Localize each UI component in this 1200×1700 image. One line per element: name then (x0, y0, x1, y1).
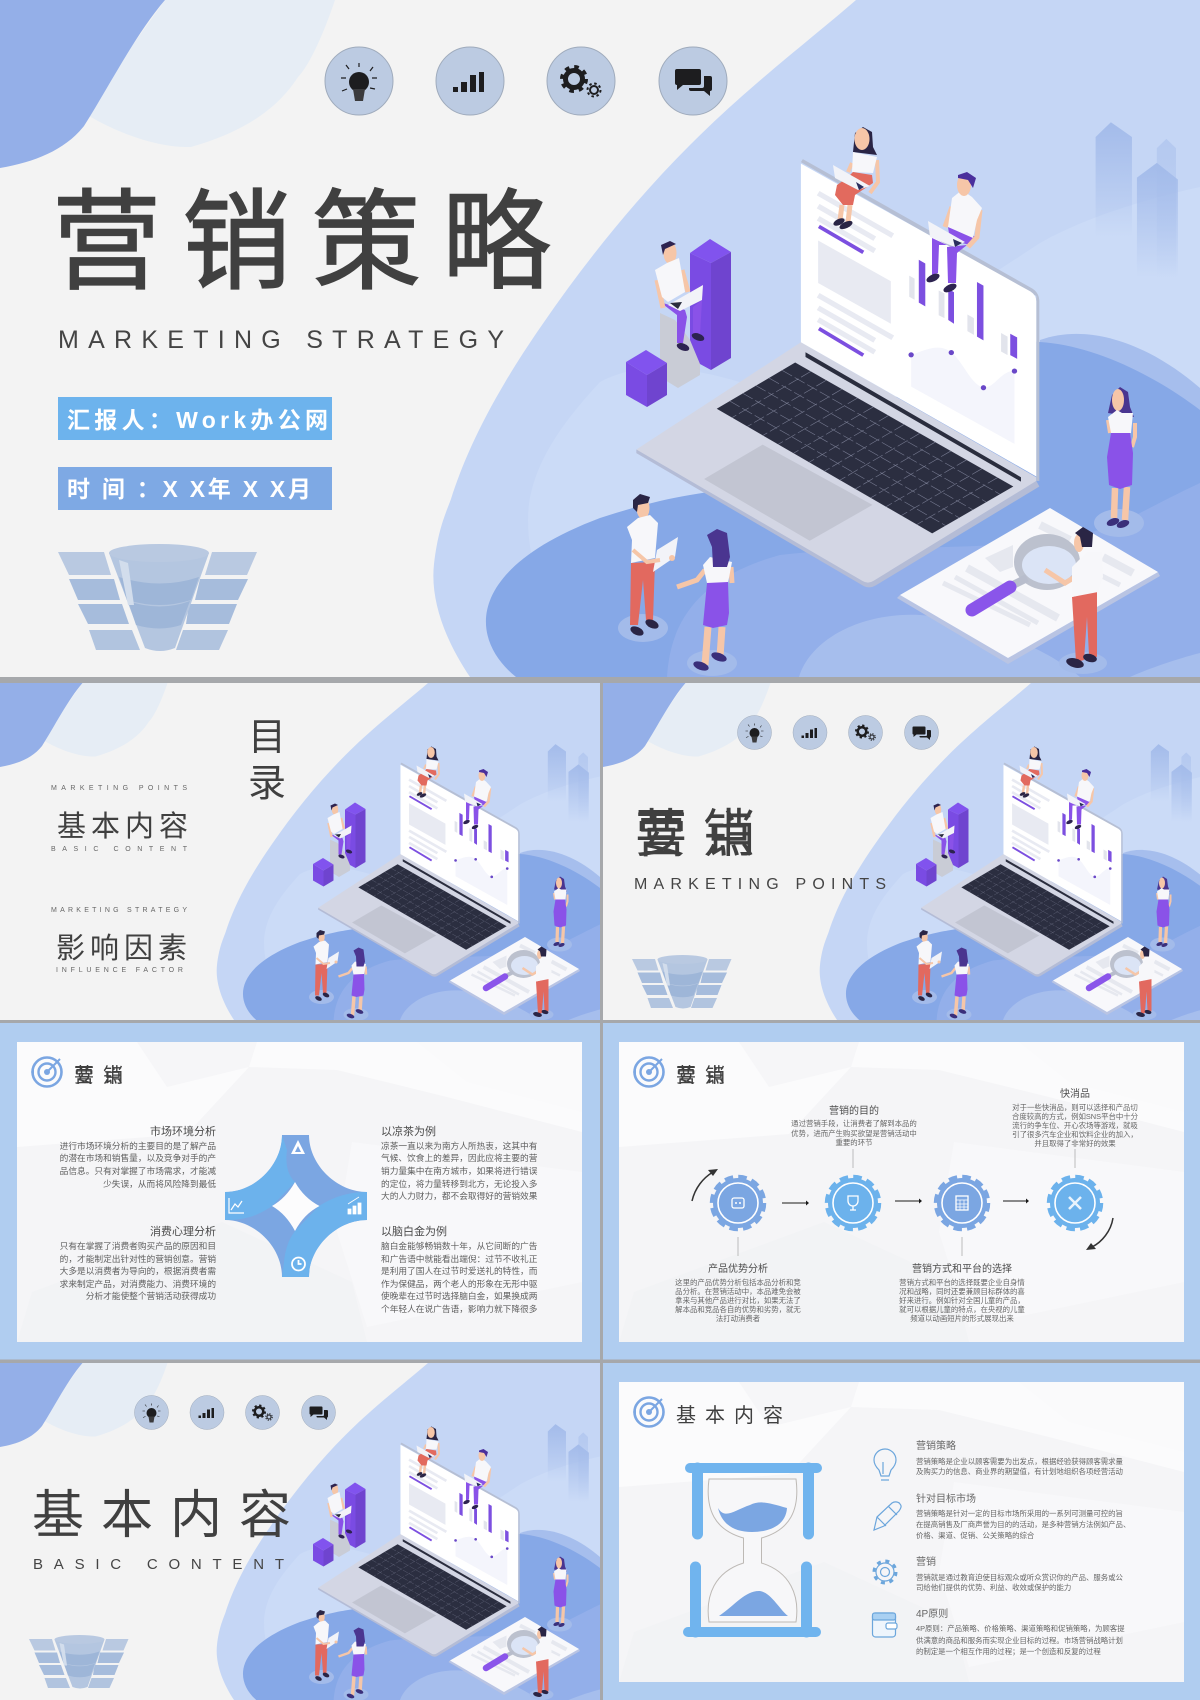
screen purple lines (819, 226, 863, 355)
text block: market analysis: 市场环境分析 (150, 1124, 216, 1138)
icon: triangle (291, 1140, 305, 1154)
list item: target market: 在提高销售及厂商声誉为目的的活动，是多种营销方法例如产品、 (916, 1520, 1130, 1529)
text block: melatonin (381, 1224, 538, 1314)
buildings (1096, 122, 1178, 278)
chart dots (908, 350, 1017, 390)
list item: target market: 针对目标市场 (916, 1492, 976, 1505)
text block: melatonin: 个年轻人在说广告语，影响力就下降很多 (381, 1303, 538, 1314)
paler lower band (667, 483, 1200, 677)
slide 4: analysis panel (0, 1022, 600, 1360)
connector lines (738, 1149, 1075, 1256)
date banner (58, 467, 332, 510)
text block: platform choice: 营销方式和平台的选择 (912, 1262, 1012, 1275)
text block: consumer psychology: 大多是以消费者为导向的，根据消费者需 (60, 1265, 216, 1276)
icon: gear outline (874, 1561, 896, 1583)
text block: melatonin: 作为保健品，两个老人的形象在无形中驱 (381, 1278, 538, 1289)
text block: purpose: 重要的环节 (836, 1138, 872, 1147)
icon: speech bubbles (659, 47, 727, 115)
text block: consumer psychology: 的，才能制定出针对性的营销创意。营销 (60, 1253, 216, 1264)
text block: consumer psychology: 分析才能使整个营销活动获得成功 (86, 1290, 216, 1301)
slide 7: hourglass panel (603, 1363, 1200, 1700)
list item: 4P (916, 1607, 1125, 1656)
list item: strategy: 营销策略 (916, 1439, 956, 1452)
person: man with magnifier (1045, 527, 1107, 674)
panel frame (603, 1022, 1200, 1360)
panel title: 要点 (74, 1064, 132, 1087)
document with magnifier (897, 508, 1160, 664)
text block: herbal tea: 凉茶一直以来为南方人所热衷，这其中有 (381, 1140, 538, 1151)
medium blue blob (486, 341, 1200, 677)
icon: wallet (872, 1613, 897, 1637)
background art (603, 683, 1200, 1022)
text block: product advantage: 品分析。在营销活动中，本品难免会被 (675, 1287, 801, 1296)
laptop screen edge (801, 159, 1039, 481)
slide 6: basic content section (0, 1363, 600, 1700)
icon: line chart (229, 1198, 244, 1213)
slide 1 background and illustration (0, 0, 1200, 677)
icon: bulb outline (874, 1449, 896, 1480)
section subtitle: MARKETING POINTS (634, 876, 886, 893)
panel surface (619, 1042, 1184, 1342)
background art (0, 1363, 600, 1700)
text block: melatonin: 使晚辈在过节时选择脑白金，如果换成两 (381, 1290, 538, 1301)
text block: consumer psychology: 消费心理分析 (150, 1224, 216, 1238)
list item: marketing: 营销就是通过教育迫使目标观众或听众赏识你的产品、服务或公 (916, 1573, 1124, 1582)
text block: fast-moving goods: 并且取得了非常好的效果 (1034, 1139, 1116, 1148)
text block: platform choice: 就可以根据儿童的特点，在央视的儿童 (899, 1305, 1025, 1314)
text block: fast-moving goods (1012, 1087, 1139, 1148)
grey column (660, 313, 700, 388)
text block: herbal tea: 气候、饮食上的差异，因此应将主要的营 (381, 1152, 538, 1163)
main title: 营销策略 (52, 182, 572, 304)
text block: melatonin: 以脑白金为例 (381, 1224, 447, 1238)
purple cube (626, 350, 667, 407)
top sand (718, 1502, 787, 1532)
list item: 4P: 供满意的商品和服务而实现企业目标的过程。市场营销战略计划 (916, 1636, 1123, 1645)
subtitle: MARKETING STRATEGY (58, 326, 504, 354)
text block: platform choice: 频道以动画短片的形式展现出来 (910, 1314, 1014, 1323)
laptop base (636, 342, 1036, 583)
text block: product advantage: 这里的产品优势分析包括本品分析和竞 (675, 1278, 801, 1287)
gear 2 (827, 1177, 879, 1229)
contents heading: 录 (248, 763, 286, 805)
contents item 2: 影响因素 (56, 932, 192, 965)
section funnel (29, 1635, 128, 1688)
text block: platform choice: 好来进行。例如针对全国儿童的产品， (899, 1296, 1025, 1305)
slide 5: gear process panel (603, 1022, 1200, 1360)
trackpad (704, 445, 872, 541)
icon: target (31, 1058, 62, 1086)
contents item 1: 基本内容 (57, 810, 193, 843)
person: standing woman (1094, 387, 1144, 537)
text block: herbal tea: 的定位，将力量转移到北方，无论投入多 (381, 1178, 538, 1189)
text block: platform choice: 营销方式和平台的选择既要企业自身情 (899, 1278, 1025, 1287)
pale blob bottom (799, 615, 1200, 677)
slide 1: cover (0, 0, 1200, 677)
text block: purpose: 通过营销手段，让消费者了解到本品的 (791, 1119, 917, 1128)
laptop (636, 159, 1039, 587)
section title: 基本内容 (32, 1487, 308, 1545)
list item: target market: 营销策略是针对一定的目标市场所采用的一系列可测量可控的旨 (916, 1509, 1123, 1518)
panel title: 营销 (676, 1064, 734, 1087)
section title (overlapping characters): 营销 (635, 806, 771, 864)
text block: market analysis (60, 1124, 216, 1189)
contents item 2: MARKETING STRATEGY (51, 907, 187, 914)
list item: target market (916, 1492, 1130, 1540)
text block: product advantage: 法打动消费者 (716, 1314, 760, 1323)
panel surface (619, 1382, 1184, 1682)
text block: fast-moving goods: 流行的争车位、开心农场等游戏，就吸 (1012, 1121, 1138, 1130)
panel frame (0, 1022, 600, 1360)
list item: marketing: 司给他们提供的优势、利益、收效或保护的能力 (916, 1583, 1071, 1592)
bar chart on screen (909, 260, 1017, 359)
gear 1 (712, 1177, 764, 1229)
person: woman talking (677, 529, 737, 676)
text block: product advantage (675, 1262, 801, 1323)
text block: purpose: 优势，进而产生购买欲望是营销活动中 (791, 1129, 917, 1138)
background art (0, 683, 600, 1022)
icon: target (633, 1398, 664, 1426)
icon: target (633, 1058, 664, 1086)
gear 3 (936, 1177, 988, 1229)
text block: consumer psychology: 只有在掌握了消费者购买产品的原因和目 (60, 1240, 216, 1251)
text block: product advantage: 产品优势分析 (708, 1262, 768, 1275)
text block: herbal tea (381, 1124, 538, 1201)
text block: melatonin: 和广告语中就能看出端倪：过节不收礼正 (381, 1253, 538, 1264)
curved arrow down (1086, 1218, 1113, 1250)
list item: 4P: 4P原则 (916, 1607, 948, 1620)
contents heading (248, 717, 286, 805)
screen area chart (911, 348, 1014, 444)
purple bar (690, 239, 731, 370)
background base (0, 0, 1200, 677)
text block: market analysis: 品信息。只有对掌握了市场需求，才能减 (60, 1165, 216, 1176)
list item: target market: 价格、渠道、促销、公关策略的综合 (916, 1531, 1035, 1540)
text block: consumer psychology (60, 1224, 216, 1301)
text block: herbal tea: 以凉茶为例 (381, 1124, 436, 1138)
top icon row (325, 47, 727, 115)
text block: fast-moving goods: 合度较高的方式，例如SNS平台中十分 (1012, 1112, 1139, 1121)
laptop base edge (636, 449, 1039, 587)
hourglass glass (708, 1479, 797, 1622)
date banner: 时 间 ：X X年 X X月 (67, 476, 311, 502)
panel frame (603, 1363, 1200, 1700)
list item: strategy: 营销策略是企业以顾客需要为出发点，根据经验获得顾客需求量 (916, 1457, 1124, 1466)
slide 2: contents (0, 683, 600, 1022)
slide 3: marketing points section (603, 683, 1200, 1022)
text block: product advantage: 解本品和竞品各自的优势和劣势，就无 (675, 1305, 801, 1314)
list item: 4P: 的制定是一个相互作用的过程；是一个创造和反复的过程 (916, 1647, 1101, 1656)
person: woman on screen (832, 127, 878, 231)
text block: fast-moving goods: 对于一些快消品，则可以选择和产品切 (1012, 1103, 1138, 1112)
section icons (738, 716, 938, 750)
contents item 2: INFLUENCE FACTOR (56, 967, 183, 974)
list item: strategy (916, 1439, 1124, 1476)
dark blob top-left (0, 0, 165, 168)
bottom sand (719, 1591, 788, 1616)
large light-blue shape (433, 0, 1200, 677)
funnel icon (58, 544, 257, 651)
contents item 1: MARKETING POINTS (51, 785, 187, 792)
reporter banner (58, 397, 332, 440)
section funnel (632, 955, 732, 1008)
list item: marketing (916, 1555, 1124, 1592)
hourglass frame (688, 1468, 817, 1632)
person: man on column (655, 241, 705, 353)
contents item 1 (51, 785, 193, 853)
hourglass (688, 1468, 817, 1632)
text block: platform choice: 况和战略，同时还要兼顾目标群体的喜 (899, 1287, 1025, 1296)
curved arrow up (692, 1169, 718, 1201)
text block: platform choice (899, 1262, 1025, 1323)
text block: melatonin: 是利用了国人在过节时爱送礼的特性，而 (381, 1265, 538, 1276)
panel surface (17, 1042, 582, 1342)
text block: fast-moving goods: 快消品 (1060, 1087, 1090, 1100)
keyboard (717, 363, 1013, 533)
pale crest behind blob (1040, 334, 1200, 430)
light blob top-left (84, 0, 335, 147)
panel title: 基本内容 (676, 1404, 792, 1427)
text block: herbal tea: 大的人力财力，都不会取得好的营销效果 (381, 1190, 538, 1201)
icon: pencil (874, 1502, 901, 1530)
icon: gears (547, 47, 615, 115)
text block: market analysis: 少失误，从而将风险降到最低 (103, 1178, 216, 1189)
text block: market analysis: 的潜在市场和销售量，以及竞争对手的产 (60, 1152, 216, 1163)
text block: purpose (791, 1104, 917, 1147)
section title (overlapping characters): 要点 (635, 806, 771, 864)
hinge bar (806, 352, 1021, 482)
screen grey block (818, 241, 891, 324)
contents heading: 目 (248, 717, 286, 759)
contents item 1: BASIC CONTENT (51, 846, 188, 853)
text block: market analysis: 进行市场环境分析的主要目的是了解产品 (60, 1140, 216, 1151)
list item: marketing: 营销 (916, 1555, 936, 1568)
screen text lines (818, 193, 893, 352)
list item: 4P: 4P原则：产品策略、价格策略、渠道策略和促销策略，为顾客提 (916, 1624, 1125, 1633)
gear 4 (1049, 1177, 1101, 1229)
text block: purpose: 营销的目的 (829, 1104, 879, 1117)
diagram: four-point star (225, 1135, 367, 1277)
text block: fast-moving goods: 引了很多汽车企业和饮料企业的加入， (1012, 1130, 1138, 1139)
icon: rising bars (348, 1197, 361, 1214)
panel title: 要点 (676, 1064, 734, 1087)
arrows between gears (782, 1198, 1029, 1206)
section icons (134, 1396, 336, 1430)
text block: herbal tea: 销力量集中在南方城市，如果将进行错误 (381, 1165, 538, 1176)
text block: consumer psychology: 求来制定产品，对消费能力、消费环境的 (60, 1278, 216, 1289)
illustration (636, 122, 1178, 587)
text block: product advantage: 拿来与其他产品进行对比，如果无法了 (675, 1296, 801, 1305)
person: man on screen (925, 172, 982, 294)
list item: strategy: 及购买力的信息、商业界的期望值，有计划地组织各项经营活动 (916, 1467, 1123, 1476)
person: man with paper (618, 494, 678, 642)
icon: bar signal (436, 47, 504, 115)
icon: light bulb (325, 47, 393, 115)
laptop screen (801, 164, 1036, 476)
lighter inner band (528, 187, 1200, 677)
icon: clock (292, 1258, 305, 1270)
section subtitle: BASIC CONTENT (33, 1556, 284, 1573)
reporter banner: 汇报人：Work办公网 (67, 407, 328, 433)
contents item 2 (51, 907, 192, 974)
text block: melatonin: 脑白金能够畅销数十年，从它间断的广告 (381, 1240, 538, 1251)
panel title: 营销 (74, 1064, 132, 1087)
